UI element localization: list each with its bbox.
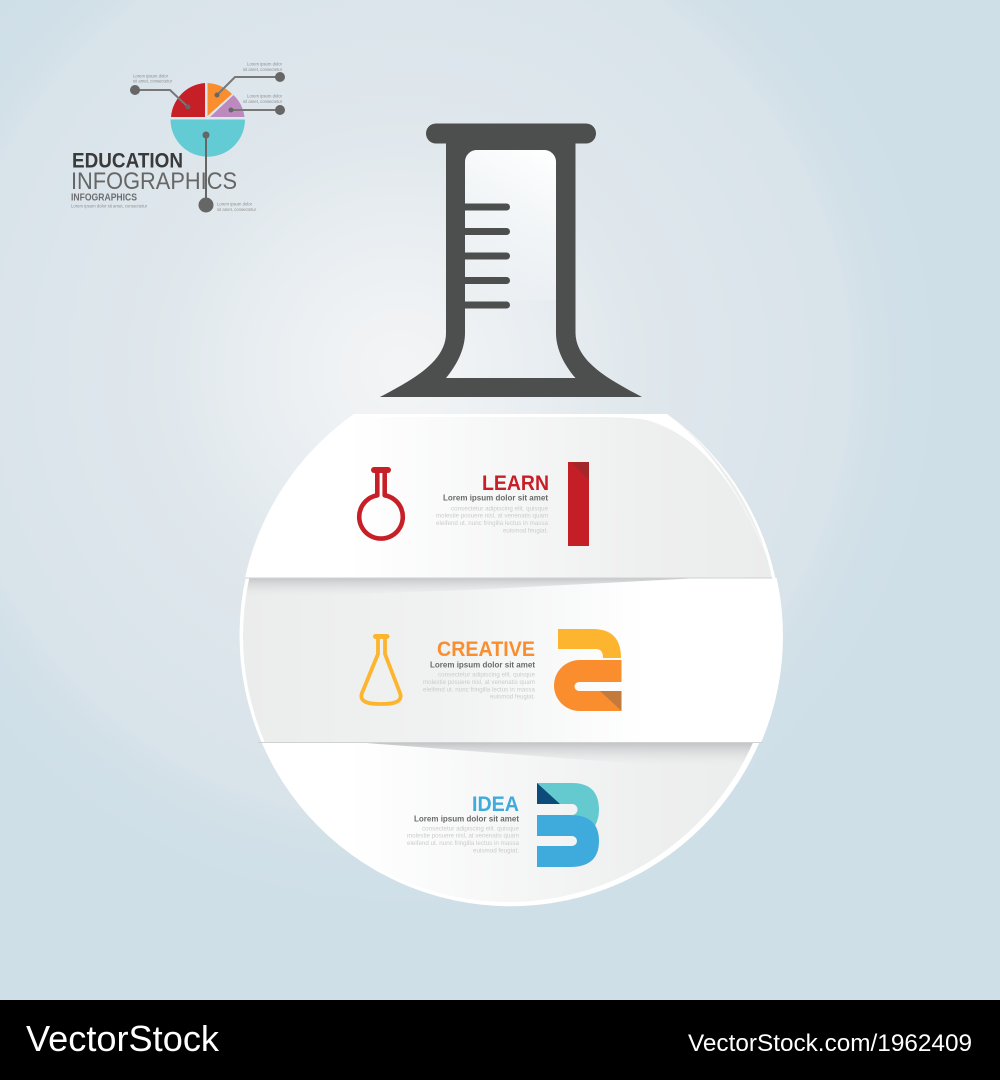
- pie slice: teal: [170, 120, 245, 157]
- watermark footer: [0, 1000, 1000, 1080]
- label: teal slice: sit amet, consectetur: [217, 207, 256, 212]
- heading: LEARN: [482, 472, 549, 495]
- watermark: image id: VectorStock.com/1962409: [688, 1030, 972, 1057]
- body text: [423, 673, 536, 701]
- pie slice: purple: [210, 95, 244, 117]
- body text: [436, 506, 549, 534]
- tagline: Lorem ipsum dolor sit amet, consectetur: [71, 204, 147, 209]
- label: teal slice: Lorem ipsum dolor: [217, 202, 252, 206]
- heading: education: EDUCATION: [72, 150, 183, 172]
- label: red slice: sit amet, consectetur: [133, 78, 172, 84]
- label: teal slice: [217, 202, 256, 212]
- label: purple slice: sit amet, consectetur: [243, 99, 282, 104]
- label: purple slice: [243, 94, 282, 104]
- label: red slice: Lorem ipsum dolor: [133, 74, 168, 78]
- body text: molestie posuere nisl, at venenatis quam: [423, 680, 535, 686]
- band 1 top highlight: [350, 414, 776, 578]
- connector: teal slice: [200, 132, 212, 212]
- connector: orange slice: [216, 73, 284, 96]
- body text: [407, 827, 520, 854]
- icon: conical flask: [361, 636, 401, 704]
- subheading: Lorem ipsum dolor sit amet: [414, 814, 519, 824]
- label: orange slice: sit amet, consectetur: [243, 67, 282, 72]
- body text: eleifend ut. nunc fringilla lectus in massa: [407, 841, 520, 847]
- heading: infographics: INFOGRAPHICS: [71, 168, 237, 195]
- body text: consectetur adipiscing elit. quisque: [422, 827, 520, 833]
- body text: euismod feugiat.: [473, 848, 519, 854]
- body text: eleifend ut. nunc fringilla lectus in massa: [423, 687, 536, 693]
- subheading: Lorem ipsum dolor sit amet: [443, 492, 548, 502]
- round flask body: [236, 414, 786, 912]
- body text: consectetur adipiscing elit. quisque: [438, 673, 536, 679]
- body text: molestie posuere nisl, at venenatis quam: [407, 834, 519, 840]
- band edge: [245, 578, 772, 742]
- band 1: [245, 414, 772, 578]
- body text: consectetur adipiscing elit. quisque: [451, 506, 549, 512]
- icon: graduated beaker: [380, 124, 642, 397]
- label: red slice: [133, 74, 172, 84]
- subheading: INFOGRAPHICS: [71, 193, 137, 204]
- heading: CREATIVE: [437, 638, 535, 661]
- pie slice: red: [171, 83, 205, 117]
- band 2: [236, 578, 786, 742]
- label: purple slice: Lorem ipsum dolor: [247, 94, 282, 98]
- numeral 3: [537, 783, 599, 867]
- body text: euismod feugiat.: [503, 528, 548, 534]
- numeral 2: [554, 629, 622, 711]
- connector: red slice: [131, 86, 190, 108]
- icon: round flask: [359, 470, 403, 539]
- body text: euismod feugiat.: [490, 695, 535, 701]
- watermark: brand: VectorStock: [26, 1018, 220, 1059]
- numeral 1: [568, 462, 589, 546]
- pie slice: orange: [208, 83, 232, 116]
- section 1: learn: [359, 462, 589, 546]
- body text: molestie posuere nisl, at venenatis quam: [436, 514, 548, 520]
- label: orange slice: [243, 62, 282, 72]
- label: orange slice: Lorem ipsum dolor: [247, 62, 282, 67]
- section 2: creative: [361, 629, 622, 711]
- outer ring: [240, 414, 781, 906]
- subheading: Lorem ipsum dolor sit amet: [430, 660, 535, 670]
- body text: eleifend ut. nunc fringilla lectus in massa: [436, 521, 549, 527]
- connector: purple slice: [230, 106, 284, 114]
- band 3: [367, 743, 753, 902]
- logo: education infographics: [71, 62, 284, 212]
- section 3: idea: [407, 783, 599, 867]
- heading: IDEA: [472, 793, 519, 816]
